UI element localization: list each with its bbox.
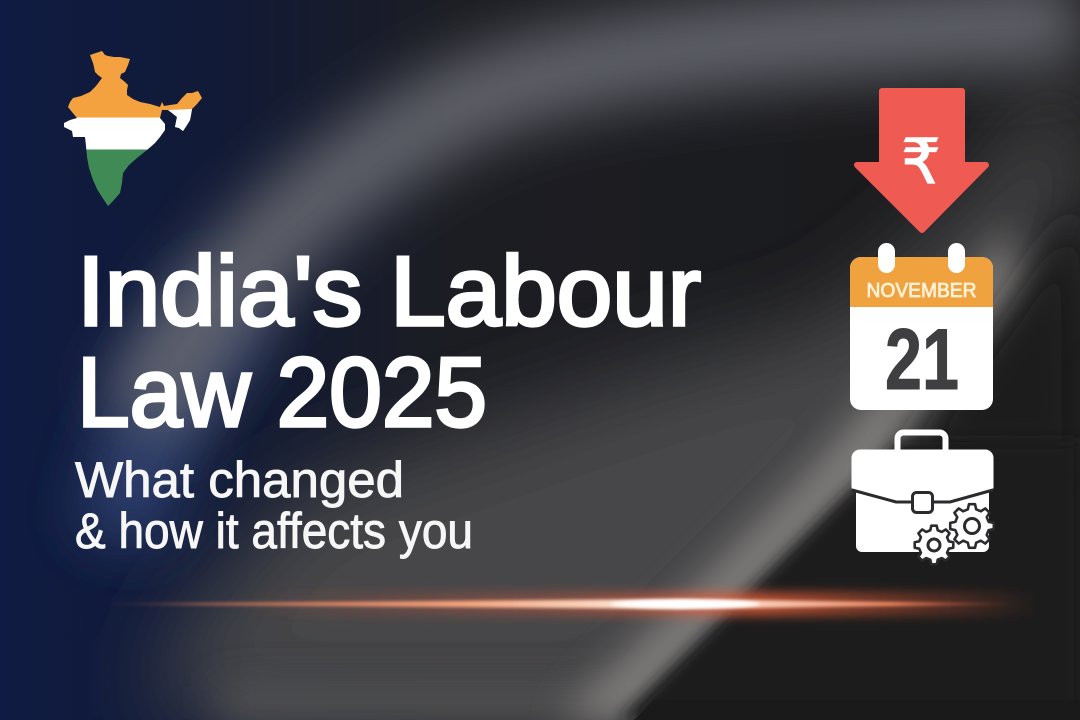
- icon: calendar: NOVEMBER: [866, 280, 976, 302]
- orange light flare: [90, 592, 1040, 616]
- icon: briefcase with gears: [852, 432, 994, 564]
- title: Law 2025: [77, 337, 487, 447]
- icon: calendar: [850, 243, 993, 410]
- icon: red down arrow with rupee: [857, 91, 986, 230]
- icon: red down arrow with rupee: ₹: [901, 125, 941, 198]
- title: [77, 236, 701, 447]
- subtitle: & how it affects you: [75, 503, 473, 559]
- title: India's Labour: [77, 236, 701, 346]
- map of India in tricolour: [64, 51, 202, 206]
- gear: large: [950, 504, 994, 548]
- subtitle: [75, 452, 473, 559]
- icon: calendar: 21: [885, 312, 959, 408]
- subtitle: What changed: [75, 452, 404, 508]
- gear: small: [915, 526, 953, 564]
